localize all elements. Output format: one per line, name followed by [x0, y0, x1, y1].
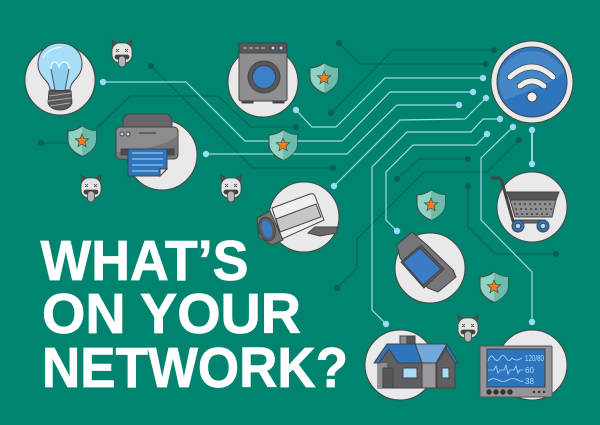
dark circuit traces [38, 40, 559, 291]
title: ON YOUR [42, 282, 301, 346]
icon: security camera [256, 182, 339, 252]
icon: washing machine [228, 43, 298, 117]
monitor readings: 120/80 [525, 354, 544, 363]
icon: shield 2 [310, 63, 338, 93]
light circuit traces [100, 75, 535, 327]
monitor readings: 38 [525, 377, 534, 386]
icon: house [365, 330, 458, 400]
icon: shield 3 [269, 130, 297, 160]
icon: devil 4 [458, 315, 478, 342]
title: WHAT’S [40, 229, 248, 293]
icon: wifi router [491, 41, 573, 123]
icon: devil 1 [112, 40, 132, 67]
title [40, 229, 348, 400]
icon: shield 5 [480, 272, 508, 302]
title: NETWORK? [42, 336, 348, 400]
icon: shield 1 [68, 126, 96, 156]
icon: patient monitor [480, 330, 567, 400]
icon: shopping cart [492, 172, 567, 242]
monitor readings: 60 [525, 366, 534, 375]
icon: shield 4 [417, 190, 445, 220]
icon: printer [116, 114, 197, 190]
icon: light bulb [25, 43, 95, 115]
monitor waveforms [488, 356, 523, 382]
monitor readings [525, 354, 544, 386]
icon: devil 3 [221, 175, 241, 202]
icon: smart watch [395, 232, 465, 303]
icon: devil 2 [81, 175, 101, 202]
